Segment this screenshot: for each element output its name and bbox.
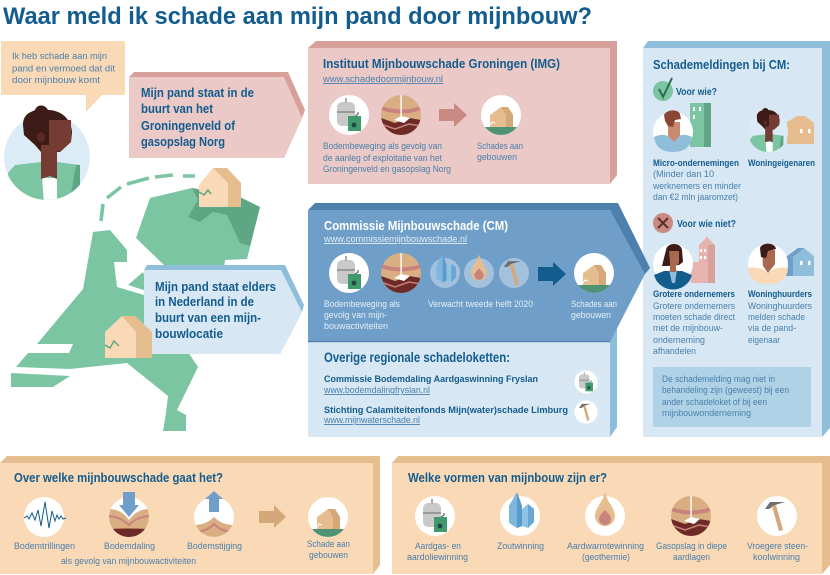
speech bubble: pand en vermoed dat dit — [12, 64, 116, 74]
speech bubble: door mijnbouw komt — [12, 75, 101, 85]
panel: Schademeldingen bij CM: Schademeldingen bij CM: — [653, 57, 790, 72]
panel: welke vormen van mijnbouw: Zoutwinning — [497, 541, 544, 551]
panel: Schademeldingen bij CM: dan €2 mln jaaromzet) — [653, 192, 738, 202]
panel: Commissie Mijnbouwschade: Commissie Mijnbouwschade (CM) — [324, 218, 508, 233]
title: Waar meld ik schade aan mijn pand door mijnbouw? — [3, 3, 592, 30]
panel: Commissie Mijnbouwschade: Verwacht tweede helft 2020 — [428, 299, 533, 309]
panel: Schademeldingen bij CM: melden schade — [748, 312, 805, 322]
panel: pand bij Groningen: buurt van het — [141, 101, 214, 116]
panel: overige regionale schadeloketten: www.mijnwaterschade.nl — [323, 415, 420, 425]
panel: IMG: de aanleg of exploitatie van het — [323, 153, 442, 163]
panel: Commissie Mijnbouwschade: gevolg van mijn- — [324, 310, 387, 320]
panel: over welke mijnbouwschade: Bodemstijging — [187, 541, 242, 551]
icon: bodemstijging — [194, 491, 234, 537]
panel: Schademeldingen bij CM: Voor wie niet? — [677, 219, 736, 230]
panel: Schademeldingen bij CM: Micro-ondernemingen — [653, 158, 739, 168]
panel: IMG: Schades aan — [477, 141, 523, 151]
panel: pand bij Groningen — [129, 72, 305, 158]
panel: welke vormen van mijnbouw — [392, 456, 830, 574]
panel: pand bij Groningen: Mijn pand staat in de — [141, 85, 254, 100]
panel: pand elders: Mijn pand staat elders — [155, 279, 276, 294]
panel: welke vormen van mijnbouw: aardoliewinning — [407, 552, 468, 562]
panel: IMG: www.schadedoormijnbouw.nl — [322, 74, 443, 84]
icon: woningeigenaar — [748, 108, 814, 154]
panel: Schademeldingen bij CM: Grotere ondernemers — [653, 289, 735, 299]
panel: pand elders: buurt van een mijn- — [155, 310, 261, 325]
panel: overige regionale schadeloketten: Stichting Calamiteitenfonds Mijn(water)schade Limburg — [324, 405, 568, 416]
panel: overige regionale schadeloketten: Overige regionale schadeloketten: — [324, 350, 510, 365]
panel: IMG: Bodembeweging als gevolg van — [323, 141, 442, 151]
note box: mijnbouwonderneming — [662, 408, 751, 418]
icon: bodemdaling — [109, 492, 149, 537]
panel: Schademeldingen bij CM: Voor wie? — [676, 87, 717, 98]
panel: over welke mijnbouwschade: Over welke mijnbouwschade gaat het? — [14, 470, 223, 485]
panel: over welke mijnbouwschade: Schade aan — [307, 539, 350, 549]
note box — [653, 367, 811, 427]
panel: Schademeldingen bij CM: (Minder dan 10 — [653, 169, 714, 179]
map of the Netherlands — [11, 175, 260, 431]
panel: welke vormen van mijnbouw: Vroegere steen- — [747, 541, 808, 551]
panel: over welke mijnbouwschade: gebouwen — [309, 550, 348, 560]
panel: over welke mijnbouwschade: Bodemtrillingen — [14, 541, 75, 551]
panel: Schademeldingen bij CM: moeten schade direct — [653, 312, 735, 322]
speech bubble — [1, 41, 125, 112]
panel: welke vormen van mijnbouw: Aardwarmtewinning — [567, 541, 644, 551]
icon: house north — [199, 168, 241, 207]
note box: De schademelding mag niet in — [662, 374, 775, 384]
panel: pand bij Groningen: gasopslag Norg — [141, 134, 225, 149]
panel: IMG — [308, 41, 617, 184]
panel: pand elders: bouwlocatie — [155, 326, 223, 341]
panel: Commissie Mijnbouwschade: bouwactiviteiten — [324, 321, 388, 331]
panel: Schademeldingen bij CM: via de pand- — [748, 323, 796, 333]
panel: Commissie Mijnbouwschade: Schades aan — [571, 299, 617, 309]
icon: grotere ondernemer — [653, 235, 715, 289]
panel: Schademeldingen bij CM: afhandelen — [653, 346, 696, 356]
panel: welke vormen van mijnbouw: aardlagen — [673, 552, 710, 562]
icon: person with question — [4, 106, 90, 205]
icon: cross — [653, 213, 673, 233]
panel: welke vormen van mijnbouw: Aardgas- en — [415, 541, 461, 551]
icon: house south — [105, 316, 152, 358]
panel: over welke mijnbouwschade: als gevolg van mijnbouwactiviteiten — [61, 556, 196, 566]
panel: Schademeldingen bij CM: eigenaar — [748, 335, 780, 345]
panel: IMG: Instituut Mijnbouwschade Groningen (IMG) — [323, 56, 560, 71]
note box: behandeling zijn (geweest) bij een — [662, 385, 789, 395]
panel: overige regionale schadeloketten: www.bodemdalingfryslan.nl — [323, 385, 430, 395]
panel: Schademeldingen bij CM: met de mijnbouw- — [653, 323, 723, 333]
panel: Schademeldingen bij CM: Woningeigenaren — [748, 158, 815, 168]
panel: welke vormen van mijnbouw: (geothermie) — [582, 552, 630, 562]
panel: welke vormen van mijnbouw: koolwinning — [753, 552, 800, 562]
panel: Schademeldingen bij CM: Woninghuurders — [748, 301, 812, 311]
panel: Commissie Mijnbouwschade: Bodembeweging als — [324, 299, 400, 309]
icon: check — [653, 78, 673, 101]
icon: woninghuurder — [748, 244, 814, 284]
panel: welke vormen van mijnbouw: Gasopslag in diepe — [656, 541, 727, 551]
panel: Schademeldingen bij CM: Grotere ondernemers — [653, 301, 735, 311]
panel: welke vormen van mijnbouw: Welke vormen van mijnbouw zijn er? — [408, 470, 607, 485]
panel: Commissie Mijnbouwschade: www.commissiemijnbouwschade.nl — [323, 234, 467, 244]
panel: pand elders — [144, 265, 304, 354]
panel: Schademeldingen bij CM: onderneming — [653, 335, 705, 345]
icon: micro-ondernemer — [653, 103, 711, 152]
panel: pand bij Groningen: Groningenveld of — [141, 118, 236, 133]
panel: Commissie Mijnbouwschade — [308, 203, 650, 342]
panel: Commissie Mijnbouwschade: gebouwen — [571, 310, 611, 320]
panel: overige regionale schadeloketten: Commissie Bodemdaling Aardgaswinning Fryslan — [324, 374, 538, 385]
panel: pand elders: in Nederland in de — [155, 294, 254, 309]
panel: over welke mijnbouwschade — [0, 456, 380, 574]
panel: Schademeldingen bij CM: werknemers en minder — [652, 181, 741, 191]
panel: IMG: gebouwen — [477, 152, 517, 162]
panel: overige regionale schadeloketten — [308, 326, 617, 437]
panel: Schademeldingen bij CM — [643, 41, 830, 437]
panel: Schademeldingen bij CM: Woninghuurders — [748, 289, 812, 299]
panel: over welke mijnbouwschade: Bodemdaling — [104, 541, 155, 551]
speech bubble: Ik heb schade aan mijn — [12, 51, 107, 61]
note box: ander schadeloket of bij een — [662, 397, 767, 407]
icon: bodemtrillingen — [24, 497, 66, 537]
panel: IMG: Groningenveld en gasopslag Norg — [323, 164, 451, 174]
